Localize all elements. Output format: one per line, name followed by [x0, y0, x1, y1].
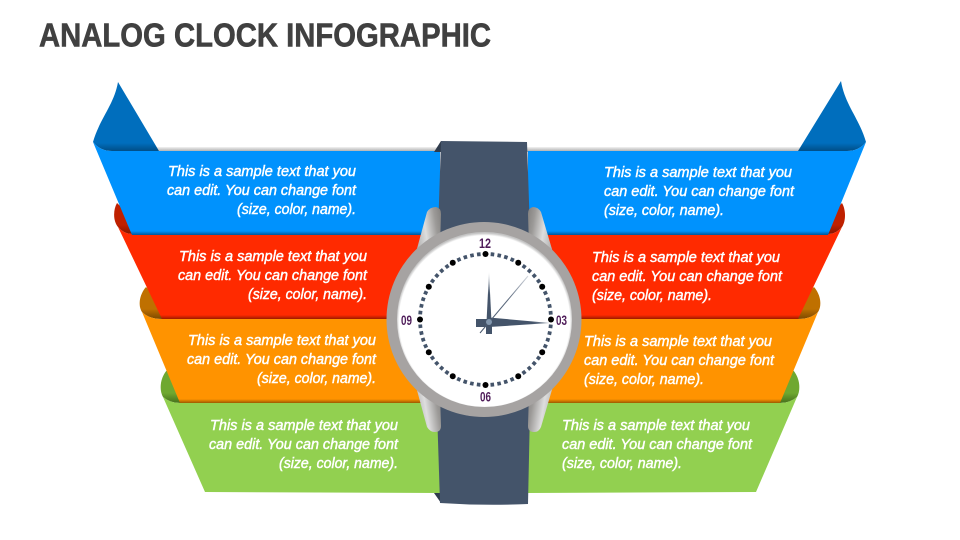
text: green left: This is a sample text that you: [210, 417, 399, 434]
text: green left: (size, color, name).: [279, 455, 398, 472]
panel: green right ribbon: [528, 370, 799, 493]
text: red left: can edit. You can change font: [178, 267, 368, 284]
text: blue right: can edit. You can change font: [604, 183, 795, 200]
clock numerals: 12: [479, 235, 491, 251]
minute track: [420, 254, 551, 385]
text: green right: [562, 417, 753, 472]
title: ANALOG CLOCK INFOGRAPHIC: [39, 16, 491, 54]
text: green right: This is a sample text that you: [562, 417, 751, 434]
text: blue right: [604, 164, 795, 219]
text: red left: (size, color, name).: [248, 286, 367, 303]
text: red right: This is a sample text that you: [592, 249, 781, 266]
clock bezel: [386, 222, 582, 417]
panel: red right ribbon: [528, 203, 845, 319]
text: green left: [209, 417, 399, 472]
clock numerals: 06: [480, 388, 491, 404]
clock numerals: 09: [401, 312, 412, 328]
clock: [386, 222, 582, 417]
text: orange left: (size, color, name).: [257, 370, 376, 387]
text: orange right: This is a sample text that you: [584, 333, 773, 350]
panel: red left ribbon: [114, 203, 440, 319]
watch strap: [434, 141, 530, 505]
clock face: [397, 232, 572, 407]
text: orange right: (size, color, name).: [584, 371, 704, 388]
panel: blue right ribbon: [525, 81, 866, 235]
text: blue left: (size, color, name).: [237, 201, 356, 218]
text: red right: (size, color, name).: [592, 287, 712, 304]
text: orange right: can edit. You can change font: [584, 352, 775, 369]
text: blue right: (size, color, name).: [604, 202, 724, 219]
text: green left: can edit. You can change font: [209, 436, 399, 453]
text: orange left: [187, 332, 377, 387]
text: blue left: [167, 163, 357, 218]
text: green right: (size, color, name).: [562, 455, 682, 472]
watch lugs: [415, 207, 554, 432]
clock numerals: [401, 235, 567, 404]
panel: blue left ribbon: [93, 82, 445, 235]
text: green right: can edit. You can change font: [562, 436, 753, 453]
clock hands: [476, 272, 550, 334]
clock numerals: 03: [556, 312, 567, 328]
panel: orange left ribbon: [140, 287, 440, 403]
text: orange left: This is a sample text that you: [188, 332, 377, 349]
text: orange right: [584, 333, 775, 388]
text: red right: can edit. You can change font: [592, 268, 783, 285]
hour markers: [417, 251, 554, 388]
panel: orange right ribbon: [528, 287, 820, 403]
text: blue right: This is a sample text that you: [604, 164, 793, 181]
text: red left: [178, 248, 368, 303]
text: blue left: can edit. You can change font: [167, 182, 357, 199]
text: blue left: This is a sample text that you: [168, 163, 357, 180]
text: red right: [592, 249, 783, 304]
panel: green left ribbon: [161, 370, 440, 493]
text: red left: This is a sample text that you: [179, 248, 368, 265]
text: orange left: can edit. You can change font: [187, 351, 377, 368]
